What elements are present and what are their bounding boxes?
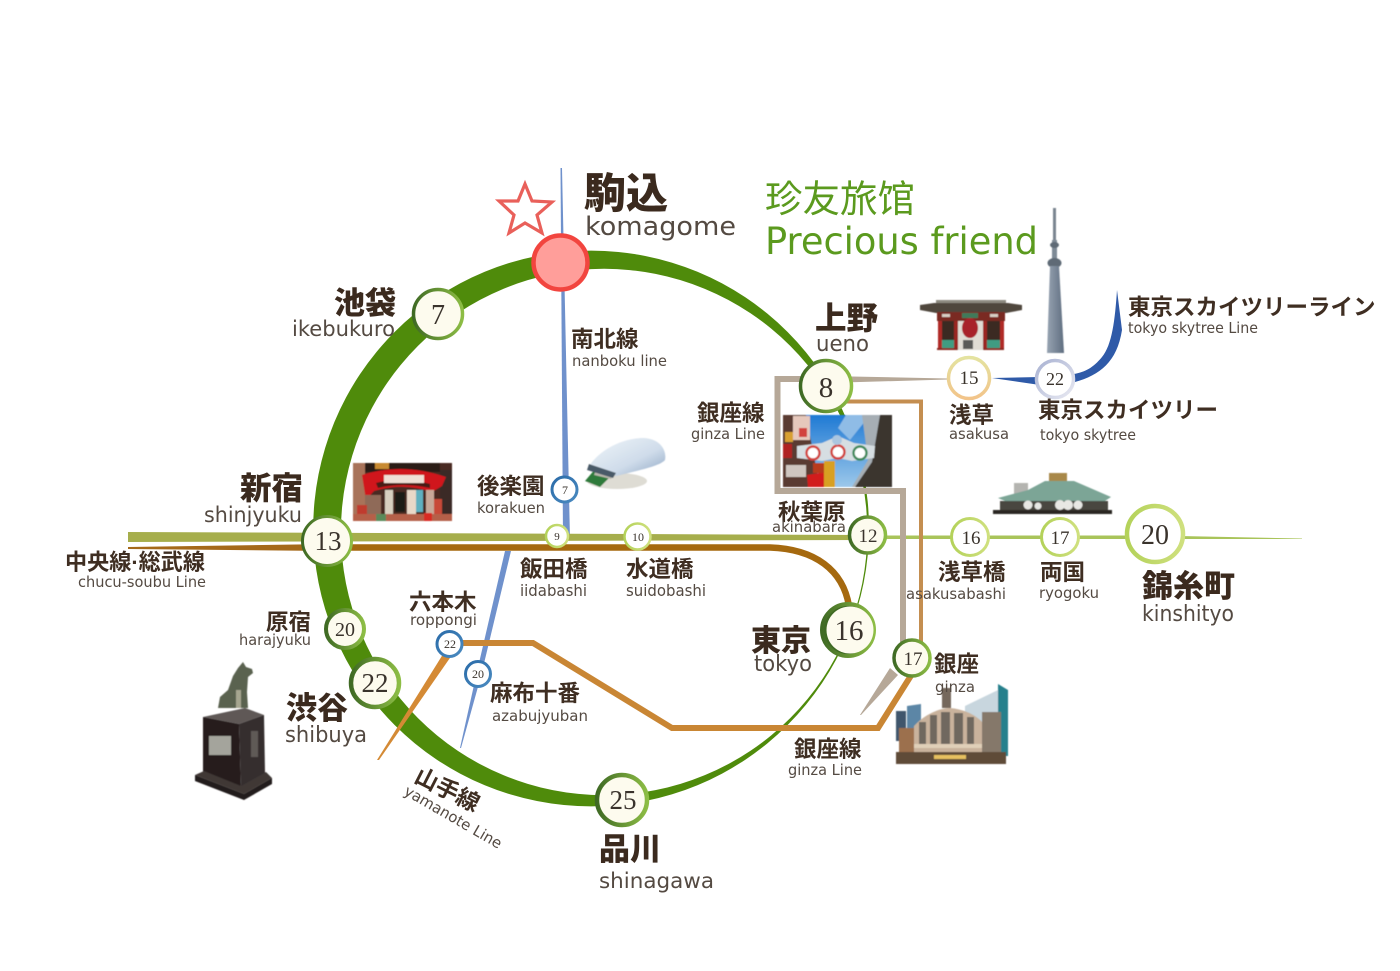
label: shibuya: shibuya xyxy=(285,723,367,748)
label: tokyo skytree line: 東京スカイツリーライン xyxy=(1128,295,1376,320)
photo: hachiko statue xyxy=(195,662,272,800)
line: sobu right curve xyxy=(330,548,849,606)
station: ryogoku 17 xyxy=(1042,518,1078,556)
line: skytree blue curve xyxy=(1074,290,1122,382)
station: kinshicho 20 xyxy=(1127,506,1183,562)
label: shibuya xyxy=(285,691,367,748)
label: nanboku line: 南北線 xyxy=(571,327,639,352)
station: shinjuku 13 xyxy=(302,516,352,566)
photo: tokyo dome xyxy=(585,438,665,489)
label: akihabara: 秋葉原 xyxy=(778,500,846,525)
label: ikebukuro xyxy=(292,286,396,341)
label: ueno: ueno xyxy=(816,332,869,357)
label: ginza line upper: ginza Line xyxy=(691,425,765,443)
label: roppongi xyxy=(409,590,477,629)
station: tokyo 16: 16 xyxy=(834,615,864,647)
label: nanboku line xyxy=(571,327,667,370)
station: asakusabashi 16 xyxy=(952,518,988,556)
photo: kaminarimon gate xyxy=(920,300,1022,350)
label: ginza: ginza xyxy=(935,678,975,696)
photo: shinjuku street xyxy=(353,463,452,521)
label: iidabashi: 飯田橋 xyxy=(520,557,588,582)
label: asakusabashi: 浅草橋 xyxy=(938,560,1006,585)
label: asakusa xyxy=(949,403,1009,443)
station: azabujyuban 20 xyxy=(466,662,490,686)
label: nanboku line: nanboku line xyxy=(572,352,667,370)
label: ginza line upper xyxy=(691,401,765,443)
station: harajyuku 20 xyxy=(326,610,364,648)
label: tokyo: 東京 xyxy=(751,625,811,658)
label: ginza xyxy=(934,652,979,696)
station: asakusabashi 16: 16 xyxy=(962,528,980,549)
icon: star xyxy=(499,184,552,233)
station: ueno 8 xyxy=(800,360,852,412)
label: shinagawa: shinagawa xyxy=(599,869,714,893)
station: asakusa 15 xyxy=(948,358,990,398)
station: komagome xyxy=(534,236,588,290)
station: akihabara 12 xyxy=(850,517,886,553)
label: ueno xyxy=(815,300,879,357)
station: ikebukuro 7 xyxy=(414,290,462,338)
label: tokyo skytree xyxy=(1038,398,1218,444)
label: korakuen: 後楽園 xyxy=(477,474,545,499)
label: komagome xyxy=(584,170,736,242)
photo: tokyo skytree xyxy=(1047,208,1064,353)
label: ryogoku: ryogoku xyxy=(1039,584,1099,602)
line: nanboku lower xyxy=(460,551,511,748)
label: ryogoku xyxy=(1039,560,1099,602)
label: harajyuku: harajyuku xyxy=(239,631,311,649)
label: tokyo skytree: 東京スカイツリー xyxy=(1038,398,1218,423)
label: harajyuku: 原宿 xyxy=(266,610,311,635)
title: Precious friend xyxy=(765,220,1038,263)
label: ueno: 上野 xyxy=(815,300,879,336)
station: shinagawa 25 xyxy=(597,775,647,825)
station: tokyo skytree 22: 22 xyxy=(1046,369,1064,389)
photo: ameyoko xyxy=(783,415,892,487)
label: tokyo skytree line: tokyo skytree Line xyxy=(1128,319,1258,337)
station: tokyo 16 xyxy=(822,604,874,656)
label: harajyuku xyxy=(239,610,311,649)
title xyxy=(765,178,1038,263)
station: ginza 17 xyxy=(894,640,930,676)
line: sobu left xyxy=(128,544,330,551)
label: suidobashi xyxy=(626,557,706,600)
station: akihabara 12: 12 xyxy=(858,526,878,547)
label: shinjuku xyxy=(204,470,303,527)
label: korakuen: korakuen xyxy=(477,499,545,517)
label: kinshicho xyxy=(1142,569,1235,627)
label: kinshicho: 錦糸町 xyxy=(1142,569,1235,604)
label: tokyo skytree line xyxy=(1128,295,1376,337)
label: ginza: 銀座 xyxy=(934,652,979,677)
label: iidabashi xyxy=(520,557,588,600)
line: ginza orange branch xyxy=(377,651,452,760)
station: harajyuku 20: 20 xyxy=(335,619,355,641)
station: shibuya 22 xyxy=(351,659,399,707)
label: yamanote line: 山手線 xyxy=(411,762,484,817)
station: azabujyuban 20: 20 xyxy=(472,667,484,681)
station: suidobashi 10: 10 xyxy=(632,530,644,544)
label: iidabashi: iidabashi xyxy=(520,581,587,600)
line: chuo right extension xyxy=(868,536,1302,539)
label: shinagawa: 品川 xyxy=(599,832,661,867)
label: tokyo skytree: tokyo skytree xyxy=(1040,426,1136,444)
label: komagome: 駒込 xyxy=(584,170,668,217)
label: azabujyuban: 麻布十番 xyxy=(490,681,581,706)
label: roppongi: roppongi xyxy=(410,611,477,629)
label: roppongi: 六本木 xyxy=(409,590,477,615)
label: ginza line lower: ginza Line xyxy=(788,761,862,779)
line: nanboku upper xyxy=(560,168,570,540)
label: ikebukuro: 池袋 xyxy=(334,286,396,321)
station: asakusa 15: 15 xyxy=(960,368,978,389)
station: ryogoku 17: 17 xyxy=(1050,528,1070,549)
station: iidabashi 9: 9 xyxy=(554,531,560,543)
line: ginza orange upper xyxy=(838,402,921,652)
title: 珍友旅馆 xyxy=(765,178,915,220)
station: kinshicho 20: 20 xyxy=(1141,520,1169,551)
label: asakusabashi xyxy=(906,560,1006,603)
station: ueno 8: 8 xyxy=(819,372,833,404)
station: korakuen 7 xyxy=(552,477,577,502)
label: azabujyuban: azabujyuban xyxy=(492,707,588,725)
label: ikebukuro: ikebukuro xyxy=(292,317,395,341)
line: skytree blue left xyxy=(992,377,1040,385)
station: shinagawa 25: 25 xyxy=(610,785,636,815)
station: roppongi 22 xyxy=(437,632,462,656)
label: shinjuku: 新宿 xyxy=(240,470,303,506)
label: shinagawa xyxy=(599,832,714,893)
label: ginza line lower xyxy=(788,737,862,779)
label: asakusabashi: asakusabashi xyxy=(906,585,1006,603)
station: shinjuku 13: 13 xyxy=(314,526,342,556)
station: ginza 17: 17 xyxy=(904,649,922,670)
label: komagome: komagome xyxy=(585,212,736,242)
station: suidobashi 10 xyxy=(624,524,650,550)
photo: ginza wako building xyxy=(896,684,1008,764)
label: asakusa: 浅草 xyxy=(949,403,994,428)
label: korakuen xyxy=(477,474,545,517)
label: shinjuku: shinjyuku xyxy=(204,503,302,527)
label: chuo sobu line: 中央線·総武線 xyxy=(65,550,205,575)
label: asakusa: asakusa xyxy=(949,425,1009,443)
label: chuo sobu line xyxy=(65,550,206,591)
station: iidabashi 9 xyxy=(546,525,568,547)
label: kinshicho: kinshityo xyxy=(1142,602,1234,627)
line: taupe loop xyxy=(778,379,903,642)
label: ginza line lower: 銀座線 xyxy=(794,737,862,762)
station: korakuen 7: 7 xyxy=(562,483,568,497)
station: shibuya 22: 22 xyxy=(362,668,388,698)
label: suidobashi: 水道橋 xyxy=(626,557,694,582)
line: ginza orange lower xyxy=(450,643,912,728)
line: taupe to asakusa xyxy=(826,376,948,383)
label: chuo sobu line: chucu-soubu Line xyxy=(78,573,206,591)
station: ikebukuro 7: 7 xyxy=(431,300,445,331)
line: yamanote ring tapered xyxy=(313,251,869,806)
line: taupe tail xyxy=(860,668,898,715)
photo: kokugikan xyxy=(993,473,1112,514)
label: ginza line upper: 銀座線 xyxy=(697,401,765,426)
label: suidobashi: suidobashi xyxy=(626,581,706,600)
label: akihabara: akinabara xyxy=(772,518,846,536)
label: yamanote line: yamanote Line xyxy=(401,782,505,852)
label: azabujyuban xyxy=(490,681,588,725)
label: ryogoku: 両国 xyxy=(1040,560,1085,585)
station: tokyo skytree 22 xyxy=(1036,360,1074,398)
label: tokyo xyxy=(751,625,812,677)
label: tokyo: tokyo xyxy=(754,652,812,677)
label: shibuya: 渋谷 xyxy=(286,691,348,726)
line: chuo olive xyxy=(128,532,868,542)
station: roppongi 22: 22 xyxy=(444,637,456,651)
label: akihabara xyxy=(772,500,846,536)
